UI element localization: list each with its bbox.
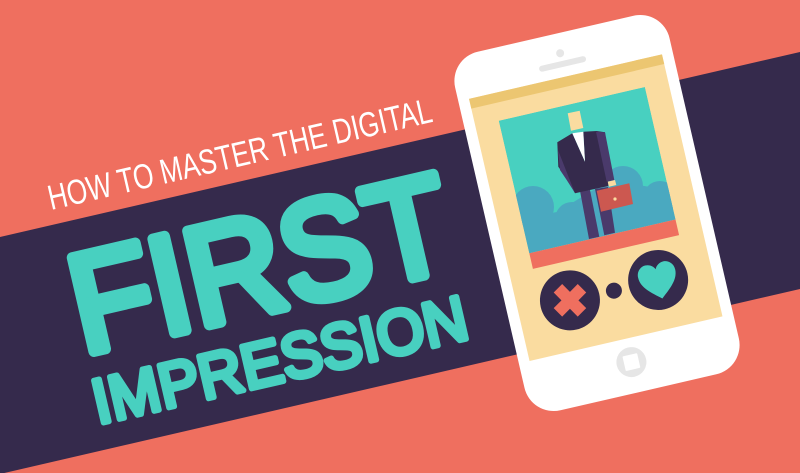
icon: cross: [546, 276, 594, 324]
title: impression: IMPRESSION: [85, 283, 474, 438]
phone: [447, 8, 749, 417]
legs: [580, 187, 615, 239]
briefcase: [597, 183, 633, 212]
icon: heart: [636, 259, 681, 303]
screen top bar: [469, 54, 664, 109]
photo caption bar: [529, 220, 679, 269]
phone body: [448, 9, 746, 417]
button: reject: [534, 264, 606, 336]
photo background: [499, 87, 675, 253]
sleeves: [558, 132, 614, 193]
home button: [613, 344, 649, 380]
clasp: [613, 197, 617, 201]
jacket: [557, 131, 608, 193]
subtitle: HOW TO MASTER THE DIGITAL: [44, 91, 436, 218]
button: like: [622, 244, 694, 316]
clouds: [516, 166, 676, 254]
illustration: businessman: [516, 110, 676, 254]
hand: [608, 180, 616, 187]
title: first: FIRST: [54, 144, 465, 383]
camera: [555, 48, 565, 58]
dot between buttons: [604, 281, 624, 300]
shirt: [572, 132, 585, 162]
speaker: [539, 56, 587, 72]
head: [568, 111, 583, 131]
screen: [469, 54, 722, 361]
profile photo: [498, 87, 676, 254]
